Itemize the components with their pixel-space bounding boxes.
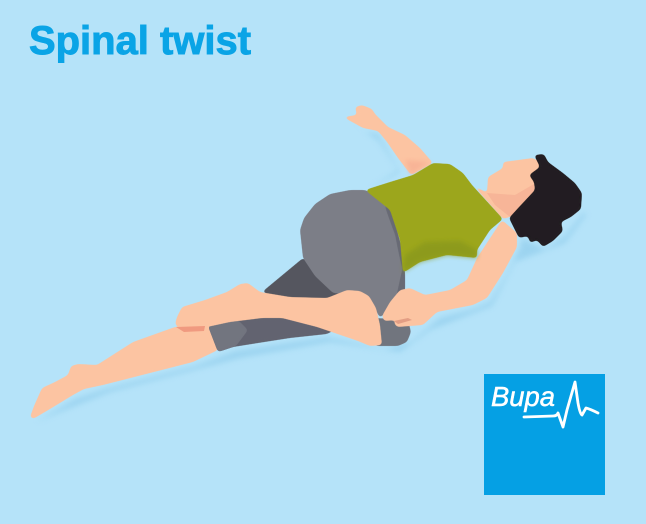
- skin fold: [176, 326, 205, 332]
- hair: [509, 154, 582, 247]
- back leg and foot: [30, 320, 218, 419]
- logo wordmark: Bupa: [491, 381, 555, 412]
- green top shading: [403, 241, 477, 272]
- title: Spinal twist: [29, 19, 251, 63]
- logo square: [484, 374, 605, 495]
- figure: woman in spinal twist pose: [30, 105, 586, 422]
- dark thigh behind: [262, 258, 345, 305]
- knee shorts: [375, 318, 411, 346]
- floor shadow: [36, 120, 586, 422]
- green top: [365, 163, 503, 273]
- dark shorts leg: [208, 316, 335, 352]
- bent leg and foot: [175, 283, 382, 346]
- logo heartbeat line: [524, 382, 598, 427]
- Bupa logo: [484, 374, 605, 495]
- raised arm: [343, 105, 433, 175]
- hand and lower arm: [382, 220, 517, 327]
- grey hip: [300, 190, 405, 318]
- neck and head: [472, 158, 547, 219]
